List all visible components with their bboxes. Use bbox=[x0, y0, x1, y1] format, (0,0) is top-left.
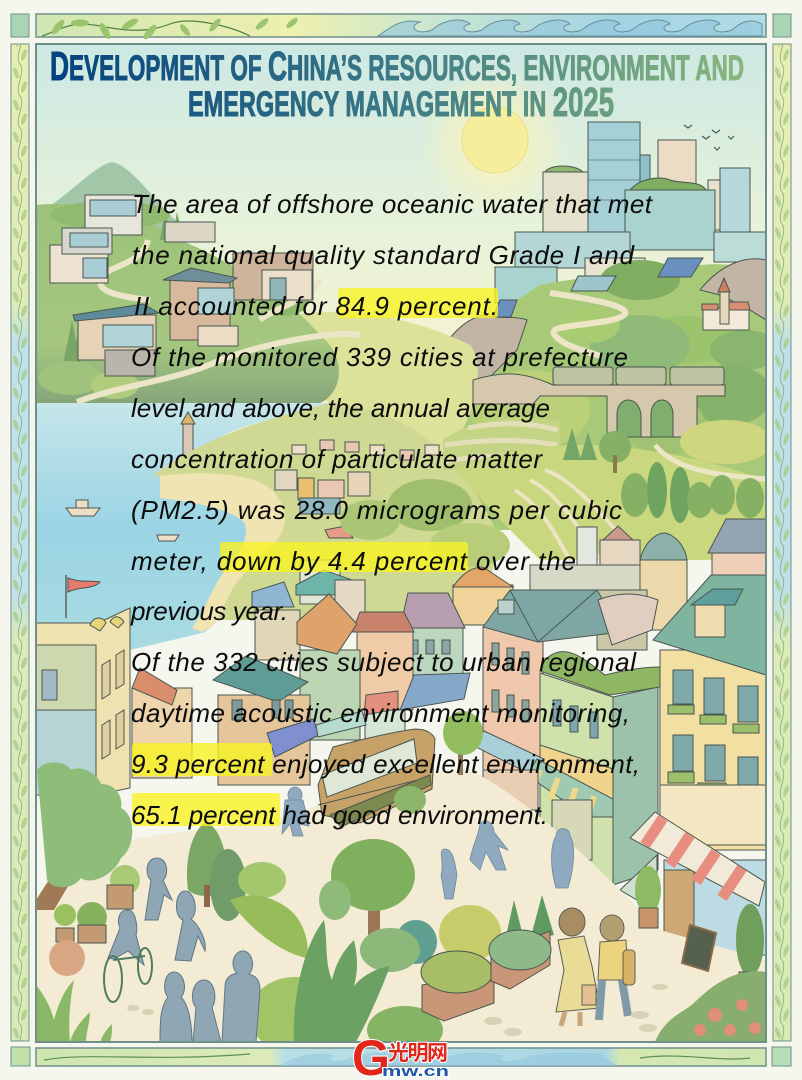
sea bbox=[36, 403, 330, 650]
central hill and terraces bbox=[443, 418, 766, 560]
glass roof bbox=[571, 276, 616, 291]
street tree by the shops bbox=[394, 711, 483, 814]
paragraph: offshore water quality bbox=[132, 189, 654, 321]
logo: gmw.cn: 光明网 bbox=[388, 1042, 448, 1065]
trees left bbox=[36, 762, 286, 921]
foreground plants left bbox=[36, 980, 112, 1042]
skyline towers bbox=[495, 122, 766, 303]
people: pedestrians bbox=[282, 787, 574, 899]
pots, board and cypress bbox=[635, 866, 764, 988]
foreground bushes and large leaves bbox=[249, 920, 443, 1054]
town: mid houses bbox=[132, 594, 405, 785]
mountain bbox=[52, 162, 176, 230]
paragraph: offshore water quality: The area of offshore oceanic water that met bbox=[132, 189, 654, 219]
rose bush bbox=[655, 971, 766, 1042]
town: pink house with slate roof bbox=[482, 590, 608, 770]
flower boxes left bbox=[49, 865, 140, 976]
paragraph: PM2.5 concentration: (PM2.5) was 28.0 micrograms per cubic bbox=[131, 495, 622, 525]
left cream building bbox=[36, 575, 130, 795]
tram bbox=[318, 729, 435, 827]
winding road on hill bbox=[550, 293, 625, 356]
tall yellow house with green roof bbox=[653, 575, 766, 850]
paragraph: acoustic environment: 9.3 percent enjoyed excellent environment, bbox=[131, 749, 640, 779]
people: family and cyclist bbox=[108, 858, 260, 1042]
lighthouse bbox=[181, 412, 195, 464]
trees on hill bbox=[563, 428, 764, 523]
paragraph: offshore water quality: the national quality standard Grade I and bbox=[132, 240, 636, 270]
hedge along the path bbox=[230, 895, 308, 958]
bicycle bbox=[104, 948, 152, 1002]
paragraph: acoustic environment: Of the 332 cities subject to urban regional bbox=[131, 647, 637, 677]
paragraph: offshore water quality: II accounted for 84.9 percent. bbox=[134, 291, 498, 321]
title bbox=[50, 43, 744, 125]
tiny houses on the coast bbox=[275, 440, 439, 538]
paragraph: PM2.5 concentration: level and above, the annual average bbox=[131, 393, 550, 423]
bottom border band bbox=[36, 1048, 766, 1066]
paragraph: PM2.5 concentration: concentration of particulate matter bbox=[131, 444, 543, 474]
top border band bbox=[36, 14, 766, 41]
rocky outcrops bbox=[433, 259, 766, 380]
paragraph: PM2.5 concentration: previous year. bbox=[130, 596, 288, 626]
stepping stones bbox=[127, 984, 668, 1036]
paragraph: acoustic environment: daytime acoustic environment monitoring, bbox=[131, 698, 630, 728]
shop with striped awning bbox=[630, 812, 766, 955]
text highlights bbox=[132, 288, 498, 826]
paragraph: acoustic environment bbox=[131, 647, 640, 830]
central tree bbox=[319, 839, 415, 960]
hillside villas, left bbox=[50, 195, 313, 376]
flower terrace bbox=[655, 420, 772, 479]
left hill bbox=[36, 204, 339, 403]
top right corner tile bbox=[773, 14, 791, 37]
left border band bbox=[11, 44, 29, 1041]
paragraph: acoustic environment: 65.1 percent had good environment. bbox=[131, 800, 548, 830]
solar panels bbox=[493, 258, 703, 317]
stairs bbox=[620, 855, 657, 900]
title: EMERGENCY MANAGEMENT IN 2025 bbox=[188, 79, 614, 125]
planters bbox=[421, 930, 551, 1021]
farmland bushes near coast bbox=[340, 479, 510, 567]
hill shading and bushes bbox=[470, 260, 780, 455]
railway viaduct and train bbox=[473, 367, 725, 437]
hillside church bbox=[702, 278, 750, 330]
sky bbox=[36, 44, 766, 444]
central bushes bbox=[360, 895, 554, 972]
roads on left hill bbox=[77, 240, 360, 402]
town: green corner shop bbox=[472, 594, 660, 885]
sun bbox=[434, 77, 556, 200]
paragraph: PM2.5 concentration bbox=[130, 342, 628, 626]
couple walking bbox=[556, 908, 635, 1026]
bottom right corner tile bbox=[772, 1047, 791, 1066]
birds bbox=[684, 125, 734, 150]
land below left hill bbox=[300, 312, 478, 453]
coast with villages bbox=[153, 403, 500, 620]
right border band bbox=[773, 44, 791, 1041]
paragraph: PM2.5 concentration: meter, down by 4.4 percent over the bbox=[131, 546, 576, 576]
top left corner tile bbox=[11, 14, 29, 37]
trees on left hill bbox=[38, 201, 309, 399]
logo: gmw.cn bbox=[352, 1030, 449, 1080]
logo: gmw.cn: mw.cn bbox=[382, 1063, 449, 1080]
town: rear houses bbox=[252, 519, 766, 660]
bottom left corner tile bbox=[11, 1047, 30, 1066]
town: lilac-roof house bbox=[352, 593, 470, 710]
boats bbox=[65, 500, 180, 542]
plaza and walkway bbox=[36, 770, 766, 1042]
body text bbox=[130, 189, 654, 830]
right hill bbox=[463, 264, 765, 530]
paragraph: PM2.5 concentration: Of the monitored 339 cities at prefecture bbox=[131, 342, 628, 372]
